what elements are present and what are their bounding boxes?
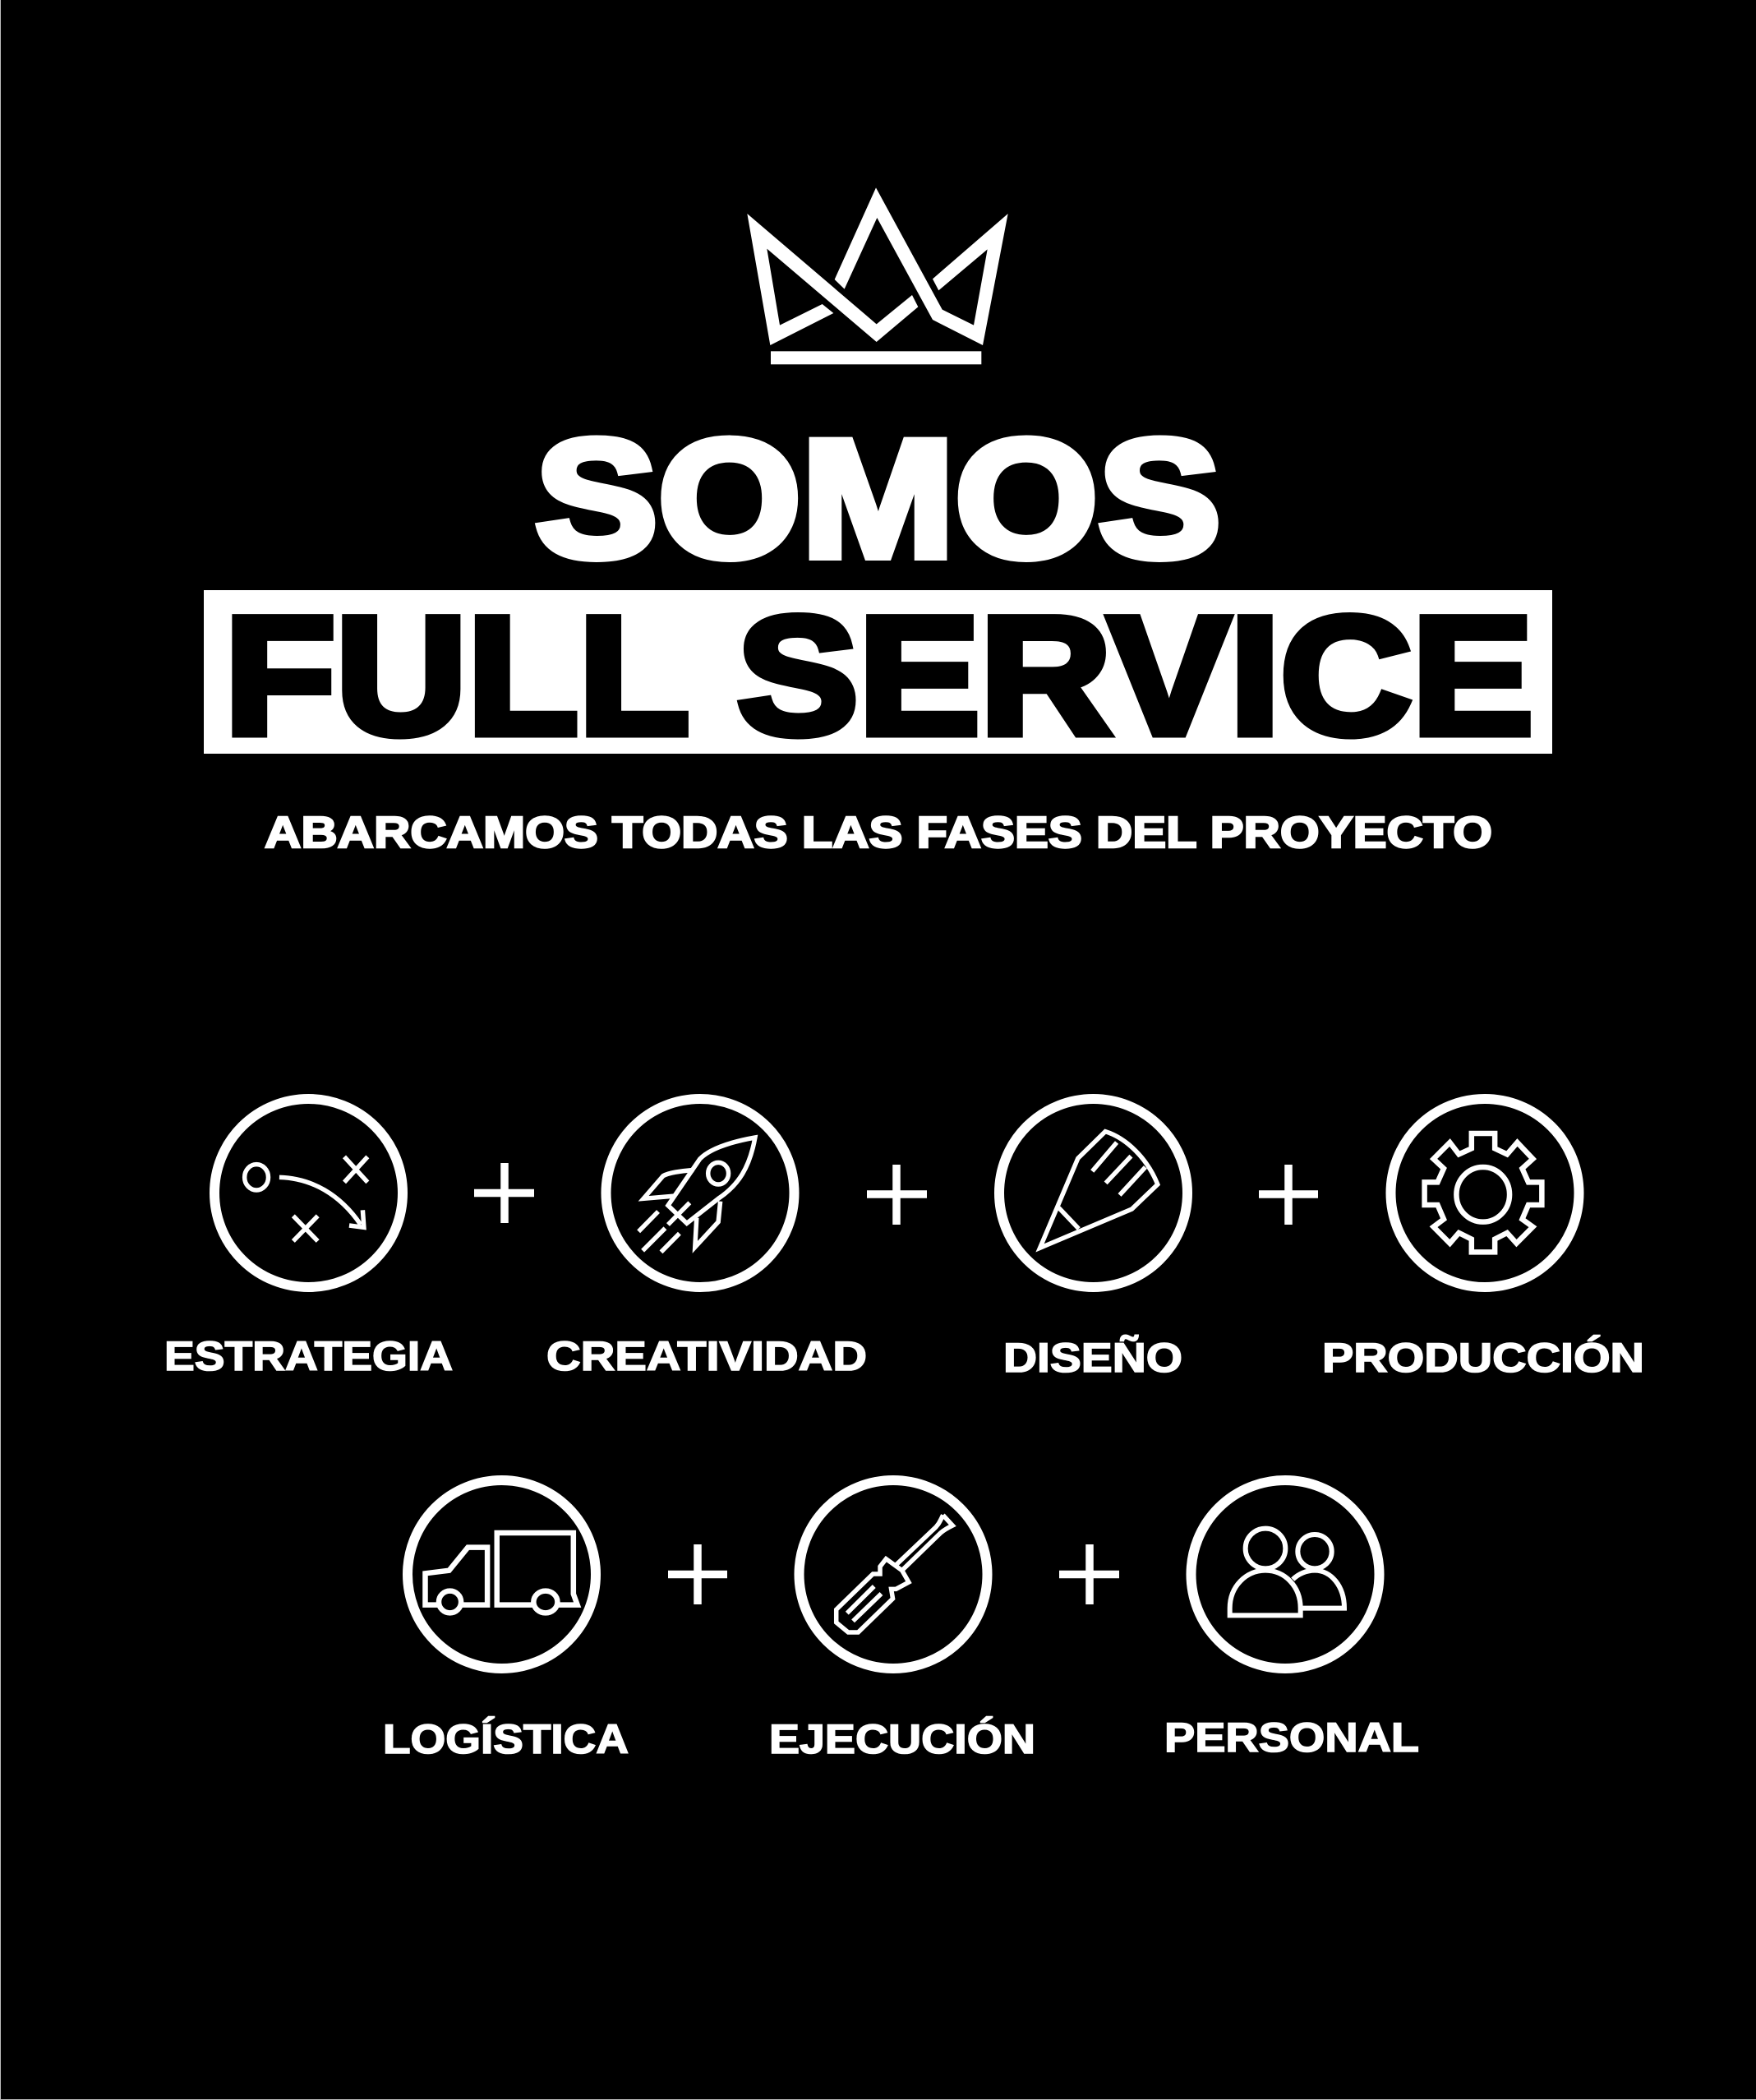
title: somos: SOMOS	[535, 405, 1221, 593]
plus	[1059, 1544, 1119, 1604]
label: logistica: LOGÍSTICA	[383, 1716, 629, 1762]
icon: strategy play	[214, 1099, 403, 1287]
title banner: full service: FULL SERVICE	[224, 582, 1533, 769]
plus	[867, 1165, 927, 1225]
phase: logistica	[383, 1480, 629, 1762]
icon: rocket	[606, 1099, 794, 1287]
phase: produccion	[1322, 1099, 1644, 1381]
subtitle: ABARCAMOS TODAS LAS FASES DEL PROYECTO	[265, 808, 1492, 857]
plus	[474, 1163, 534, 1223]
label: ejecucion: EJECUCIÓN	[769, 1716, 1035, 1762]
plus	[1259, 1165, 1318, 1225]
icon: truck	[408, 1480, 596, 1668]
plus	[668, 1544, 727, 1604]
phase: creatividad	[546, 1099, 867, 1379]
icon: screwdriver	[799, 1480, 988, 1668]
icon: crown logo	[747, 187, 1008, 364]
label: creatividad: CREATIVIDAD	[546, 1333, 867, 1379]
icon: people	[1191, 1480, 1379, 1668]
phase: estrategia	[164, 1099, 453, 1379]
phase: personal	[1164, 1480, 1419, 1761]
phase: diseno	[999, 1099, 1187, 1381]
icon: pencil	[999, 1099, 1187, 1287]
label: personal: PERSONAL	[1164, 1715, 1419, 1761]
icon: gear	[1390, 1099, 1579, 1287]
phase: ejecucion	[769, 1480, 1035, 1762]
label: estrategia: ESTRATEGIA	[164, 1333, 453, 1379]
label: produccion: PRODUCCIÓN	[1322, 1335, 1644, 1381]
label: diseno: DISEÑO	[1003, 1335, 1182, 1381]
